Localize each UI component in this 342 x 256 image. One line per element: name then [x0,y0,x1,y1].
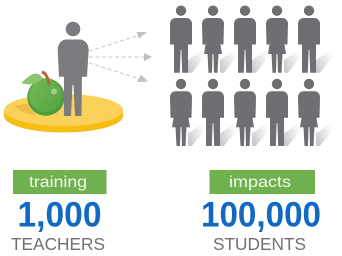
caption: students: STUDENTS [213,234,306,254]
green apple [14,72,65,116]
number: students: 100,000 [201,196,321,234]
teacher figure [58,22,89,116]
impacts label [210,170,315,194]
impacts label: impacts [229,174,291,191]
panel: students grid [170,6,338,146]
yellow disc [4,94,123,132]
panel: teacher illustration [4,22,152,133]
training label [13,170,106,194]
student figures [170,6,320,146]
caption: teachers: TEACHERS [11,234,105,254]
training label: training [29,174,87,191]
number: teachers: 1,000 [18,196,102,234]
arrows [89,32,152,82]
shadows [188,50,338,146]
